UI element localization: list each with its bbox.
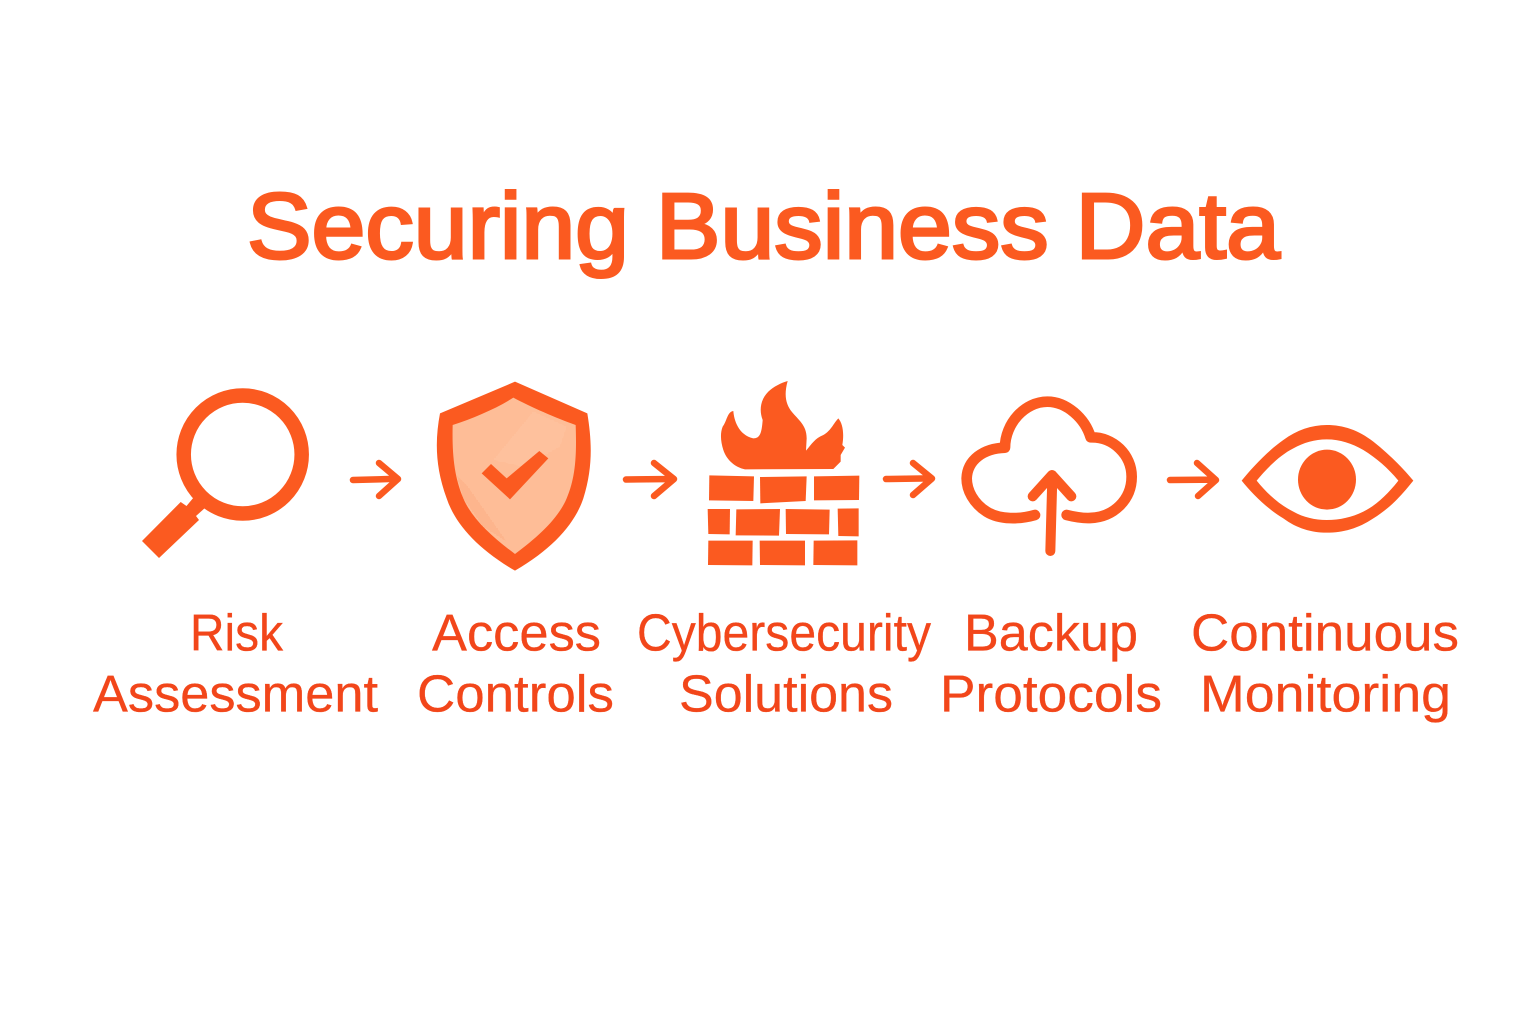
arrow 3 (886, 463, 932, 495)
label: Backup Protocols (940, 604, 1162, 724)
label: Backup Protocols: Protocols (940, 666, 1162, 724)
icon: eye (1242, 425, 1413, 533)
icon: shield with check mark (437, 382, 591, 571)
label: Backup Protocols: Backup (964, 604, 1138, 662)
arrow 1 (353, 463, 398, 496)
label: Continuous Monitoring: Monitoring (1200, 666, 1451, 724)
label: Continuous Monitoring: Continuous (1191, 604, 1459, 662)
label: Cybersecurity Solutions: Cybersecurity (637, 604, 931, 662)
title: Securing Business Data (247, 174, 1280, 278)
label: Risk Assessment: Assessment (93, 666, 379, 724)
label: Cybersecurity Solutions: Solutions (679, 666, 893, 724)
brick wall (708, 475, 859, 565)
label: Risk Assessment: Risk (190, 604, 284, 662)
icon: firewall with flame (708, 381, 859, 565)
icon: cloud upload (967, 402, 1132, 551)
label: Access Controls (417, 604, 614, 724)
arrow 4 (1170, 463, 1216, 496)
label: Cybersecurity Solutions (637, 604, 931, 724)
icon: magnifying glass (142, 396, 302, 558)
label: Risk Assessment (93, 604, 379, 724)
label: Access Controls: Access (432, 604, 601, 662)
label: Continuous Monitoring (1191, 604, 1459, 724)
arrow 2 (626, 463, 674, 496)
label: Access Controls: Controls (417, 666, 614, 724)
flame (721, 381, 845, 469)
